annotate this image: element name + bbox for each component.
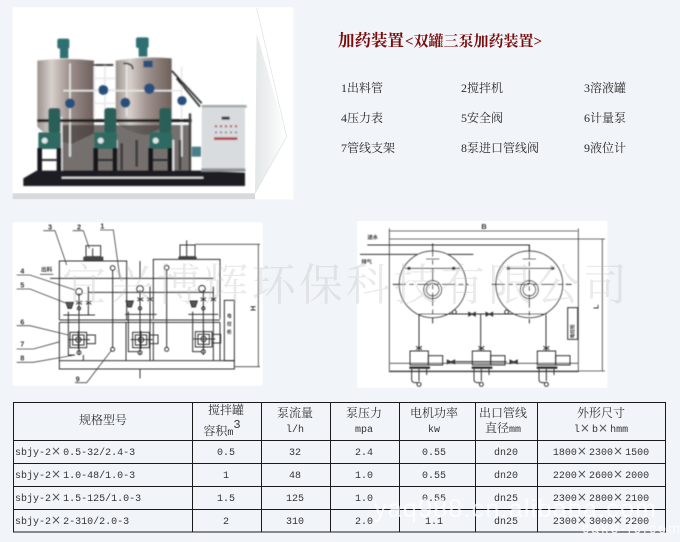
parts list: 7管线支架 — [341, 140, 395, 155]
table rows: dn25 — [494, 493, 518, 505]
callout numbers: 出料 — [41, 265, 53, 274]
table rows: dn25 — [494, 516, 518, 528]
parts list: 8泵进口管线阀 — [461, 140, 539, 155]
table header: 外形尺寸 — [577, 405, 625, 421]
callout numbers: 7 — [20, 340, 24, 349]
table rows: 125 — [286, 494, 304, 505]
table rows: dn20 — [494, 470, 518, 482]
parts list: 6计量泵 — [584, 110, 626, 125]
parts list — [341, 80, 626, 155]
table grid — [14, 402, 666, 532]
table rows: sbjy-2×2-310/2.0-3 — [15, 513, 129, 528]
ladder and pipework — [62, 63, 203, 177]
parts list: 2搅拌机 — [461, 80, 503, 95]
table rows: 1.0 — [355, 494, 373, 505]
table header: mpa — [355, 425, 373, 436]
control cabinet: 柜 — [227, 329, 232, 336]
table header: 直径mm — [485, 420, 521, 436]
callout numbers: 5 — [20, 281, 24, 290]
icon: three metering pumps — [37, 108, 172, 178]
icon: left tank plan — [393, 243, 468, 323]
table rows: sbjy-2×1.0-48/1.0-3 — [15, 467, 135, 482]
callout numbers — [17, 222, 120, 383]
table rows: 2300×2800×2100 — [553, 490, 649, 505]
parts list: 5安全阀 — [461, 110, 503, 125]
icon: metering pumps — [68, 330, 221, 349]
frame and dimensions: L — [592, 304, 601, 309]
table header — [79, 402, 628, 439]
icon: left mixer motor — [57, 39, 69, 58]
panel: front elevation drawing — [13, 222, 263, 386]
frame and dimensions — [389, 222, 605, 372]
table rows: 2300×3000×2200 — [553, 513, 649, 528]
icon: control cabinet — [201, 105, 247, 172]
pipework — [50, 265, 218, 361]
parts list: 3溶液罐 — [584, 80, 626, 95]
table header: 泵压力 — [346, 405, 382, 421]
table rows — [15, 444, 649, 528]
specification table — [13, 402, 666, 532]
parts list: 1出料管 — [341, 80, 383, 95]
table rows: 2200×2600×2000 — [553, 467, 649, 482]
table rows: 1.1 — [425, 517, 443, 528]
table rows: 0.55 — [422, 448, 446, 459]
table rows: 2 — [223, 517, 229, 528]
table header: kw — [428, 424, 440, 436]
floor shadow under tanks — [62, 125, 190, 172]
inlet and vent lines: 排气 — [361, 258, 373, 266]
table rows: 48 — [289, 471, 301, 482]
table rows: sbjy-2×0.5-32/2.4-3 — [15, 444, 135, 459]
control cabinet — [224, 300, 234, 361]
icon: mixers — [83, 245, 197, 261]
dimension H: H — [249, 306, 258, 311]
table rows: 0.55 — [422, 471, 446, 482]
table rows: 1.5 — [217, 494, 235, 505]
table rows: 2.4 — [355, 448, 373, 459]
table header: 容积m — [203, 425, 233, 439]
table header: 搅拌罐 — [208, 402, 244, 418]
panel: equipment photo — [13, 7, 293, 207]
callout numbers: 4 — [20, 267, 25, 276]
table rows: 310 — [286, 517, 304, 528]
table rows: dn20 — [494, 447, 518, 459]
watermark: company name: 宜兴博辉环保科技有限公司 — [62, 249, 627, 313]
panel: plan view drawing — [357, 221, 607, 388]
dimension H — [195, 244, 260, 367]
table header: 泵流量 — [277, 405, 313, 421]
table header: l/h — [286, 424, 304, 436]
callout numbers: 2 — [77, 222, 81, 231]
table rows: 2.0 — [355, 517, 373, 528]
table rows: 1.0 — [355, 471, 373, 482]
table rows: 0.55 — [422, 494, 446, 505]
control cabinet: 电控柜 — [569, 324, 576, 338]
icon: left dosing tank — [37, 59, 94, 144]
connecting pipes and valves — [419, 310, 547, 364]
title: 加药装置<双罐三泵加药装置> — [338, 30, 542, 50]
control cabinet — [568, 308, 578, 339]
table header: 出口管线 — [479, 405, 527, 421]
icon: right tank plan — [492, 245, 572, 323]
table header: 3 — [233, 418, 241, 432]
icon: metering pumps — [409, 346, 570, 386]
table rows: 1 — [223, 471, 229, 482]
table header: l×b×hmm — [574, 421, 628, 436]
table rows: sbjy-2×1.5-125/1.0-3 — [15, 490, 141, 505]
icon: blue gauges — [65, 61, 187, 108]
table header: 规格型号 — [79, 412, 127, 428]
inlet and vent lines: 进水 — [367, 233, 379, 241]
watermark: corner mark: cake-fc.com — [582, 520, 680, 536]
watermark: site url: yaq988.cn.alibaba.com — [374, 495, 656, 523]
callout numbers: 1 — [100, 222, 104, 231]
callout numbers: 3 — [48, 222, 52, 231]
control cabinet: 电 — [227, 313, 232, 320]
callout numbers: 6 — [20, 317, 24, 326]
table rows: 1800×2300×1500 — [553, 444, 649, 459]
table rows: 0.5 — [217, 448, 235, 459]
icon: equipment base — [23, 171, 245, 186]
callout numbers: 9 — [76, 374, 80, 383]
parts list: 9液位计 — [584, 140, 626, 155]
frame and dimensions: B — [481, 222, 487, 231]
icon: right dosing tank — [116, 58, 172, 135]
control cabinet: 控 — [227, 321, 232, 328]
parts list: 4压力表 — [341, 110, 383, 125]
inlet and vent lines — [360, 233, 529, 266]
callout numbers: 8 — [20, 353, 24, 362]
table rows: 32 — [289, 448, 301, 459]
icon: right mixer motor — [136, 37, 149, 57]
tanks and frame — [59, 240, 234, 378]
table header: 电机功率 — [410, 405, 458, 421]
